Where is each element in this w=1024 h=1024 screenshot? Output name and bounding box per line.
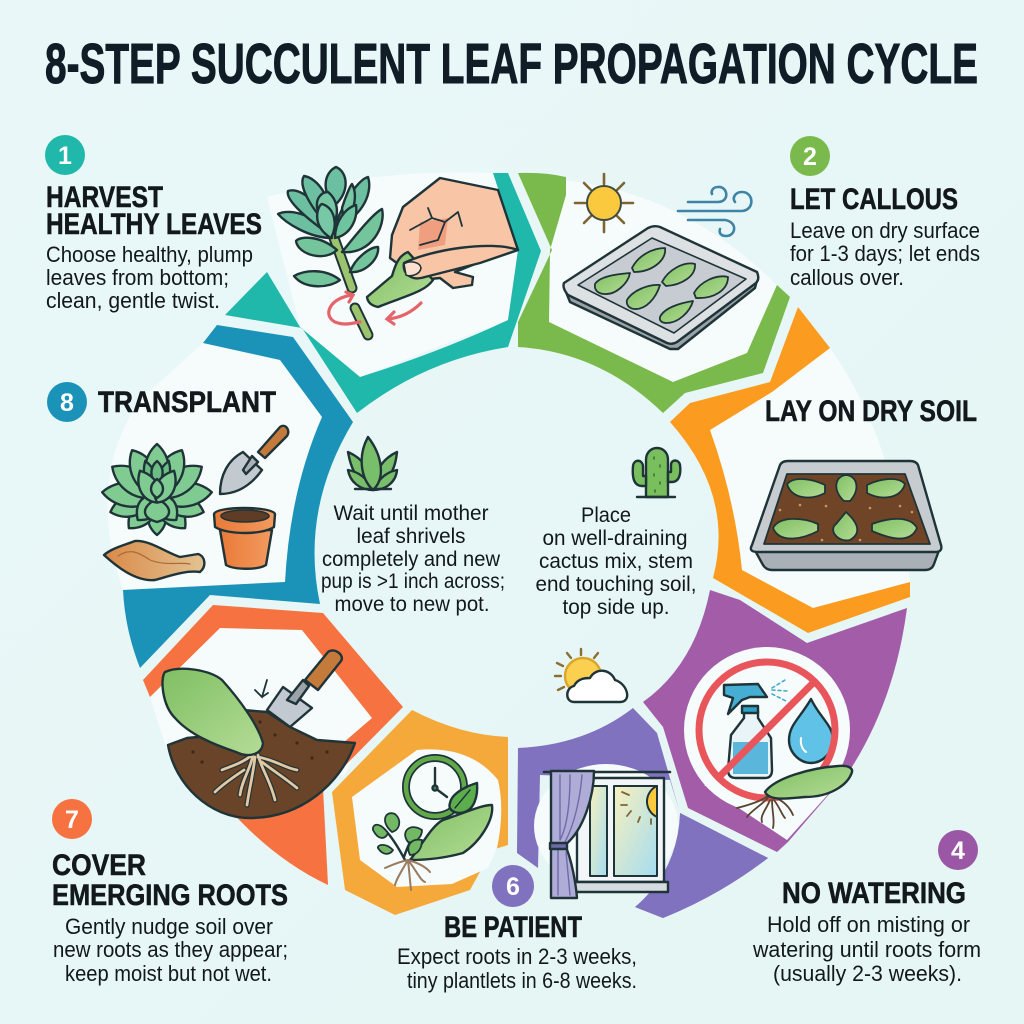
wait-until text: move to new pot. bbox=[334, 592, 490, 616]
step 8 badge bbox=[47, 382, 87, 422]
step 7 badge: 7 bbox=[65, 806, 79, 834]
step 2 heading: LET CALLOUS bbox=[790, 183, 958, 216]
wait-until text: Wait until mother bbox=[334, 501, 488, 525]
icon: window with curtain bbox=[544, 771, 670, 898]
step 1 body: clean, gentle twist. bbox=[46, 288, 220, 313]
step 1 heading bbox=[46, 181, 262, 241]
icon: trowel bbox=[267, 650, 342, 727]
panel: step 1 text bbox=[45, 135, 262, 313]
wait-until text: pup is >1 inch across; bbox=[321, 569, 505, 593]
wait-until text bbox=[321, 501, 505, 616]
step 8 heading: TRANSPLANT bbox=[98, 386, 276, 419]
icon: push-down arrow bbox=[255, 680, 268, 697]
icon: garden trowel bbox=[220, 426, 288, 494]
icon: spray bottle bbox=[724, 680, 787, 778]
icon: hand holding leaf bbox=[367, 178, 518, 307]
icon: mother leaf and plantlets bbox=[373, 783, 492, 890]
step 1 badge: 1 bbox=[58, 142, 72, 170]
panel: step 2 let callous bbox=[518, 136, 980, 413]
icon: tray of leaves bbox=[564, 226, 758, 349]
center: step 8 detail bbox=[321, 437, 505, 616]
step 6 badge: 6 bbox=[506, 873, 520, 901]
icon: prohibition sign bbox=[699, 662, 835, 798]
step 4 heading: NO WATERING bbox=[782, 877, 966, 910]
center: step 3 detail bbox=[536, 448, 696, 702]
panel: step 8 transplant bbox=[47, 325, 353, 668]
step 4 body: watering until roots form bbox=[752, 937, 981, 962]
place text: top side up. bbox=[562, 595, 670, 619]
step 4 body: (usually 2-3 weeks). bbox=[773, 961, 962, 986]
step 7 heading: COVER bbox=[52, 849, 146, 882]
icon: large leaf with roots bbox=[162, 669, 297, 805]
panel: step 6 be patient bbox=[332, 710, 637, 993]
icon: terracotta pot bbox=[214, 508, 275, 569]
step 6 body bbox=[397, 944, 637, 993]
icon: soil tray bbox=[751, 461, 941, 570]
step 2 body: for 1-3 days; let ends bbox=[790, 241, 980, 266]
step 4 badge bbox=[938, 830, 978, 870]
icon: sun behind cloud bbox=[555, 649, 627, 702]
panel: step 1 harvest healthy leaves bbox=[225, 167, 541, 413]
step 7 heading: EMERGING ROOTS bbox=[52, 879, 288, 912]
step 4 body bbox=[752, 912, 981, 986]
step 1 badge bbox=[45, 135, 85, 175]
place text bbox=[536, 503, 696, 619]
icon: wind bbox=[678, 187, 751, 236]
panel: step 5 place in bright light bbox=[517, 708, 768, 918]
step 6 badge bbox=[492, 865, 534, 907]
step 2 body bbox=[790, 218, 980, 290]
step 1 body bbox=[46, 242, 253, 313]
icon: rosette bbox=[101, 444, 213, 535]
icon: shriveled mother leaf bbox=[104, 541, 204, 580]
wait-until text: leaf shrivels bbox=[356, 524, 466, 548]
icon: small plant bbox=[348, 437, 397, 490]
icon: water drop bbox=[789, 699, 833, 763]
icon: twist arrows bbox=[329, 292, 421, 324]
step 7 body: Gently nudge soil over bbox=[65, 914, 273, 939]
panel: step 7 cover emerging roots bbox=[52, 605, 403, 986]
step 1 heading: HEALTHY LEAVES bbox=[46, 208, 262, 241]
wait-until text: completely and new bbox=[322, 547, 500, 571]
step 7 badge bbox=[52, 799, 92, 839]
step 6 body: Expect roots in 2-3 weeks, bbox=[397, 944, 637, 969]
step 6 body: tiny plantlets in 6-8 weeks. bbox=[407, 968, 637, 993]
panel: step 3 lay on dry soil bbox=[670, 307, 977, 633]
step 1 body: Choose healthy, plump bbox=[46, 242, 253, 267]
step 7 body: new roots as they appear; bbox=[53, 937, 288, 962]
step 2 badge bbox=[790, 136, 830, 176]
place text: on well-draining bbox=[542, 526, 688, 550]
step 3 heading: LAY ON DRY SOIL bbox=[765, 395, 977, 428]
step 7 body bbox=[53, 914, 288, 986]
icon: succulent cutting bbox=[278, 167, 383, 335]
step 4 badge: 4 bbox=[951, 837, 965, 865]
step 2 body: Leave on dry surface bbox=[790, 218, 980, 243]
step 1 heading: HARVEST bbox=[46, 181, 163, 214]
step 6 heading: BE PATIENT bbox=[444, 911, 582, 944]
icon: cactus bbox=[633, 448, 680, 497]
panel: step 4 no watering bbox=[643, 590, 981, 986]
icon: clock ring bbox=[406, 758, 464, 816]
step 1 body: leaves from bottom; bbox=[46, 265, 229, 290]
step 2 body: callous over. bbox=[790, 265, 904, 290]
step 7 body: keep moist but not wet. bbox=[65, 961, 272, 986]
step 8 badge: 8 bbox=[60, 389, 74, 417]
place text: Place bbox=[581, 503, 631, 527]
icon: soil mound bbox=[168, 710, 355, 818]
step 7 heading bbox=[52, 849, 288, 912]
place text: cactus mix, stem bbox=[539, 549, 693, 573]
icon: sun bbox=[575, 174, 633, 232]
icon: leaf with roots bbox=[737, 766, 852, 828]
place text: end touching soil, bbox=[536, 572, 696, 596]
step 2 badge: 2 bbox=[803, 143, 817, 171]
step 4 body: Hold off on misting or bbox=[767, 912, 970, 937]
